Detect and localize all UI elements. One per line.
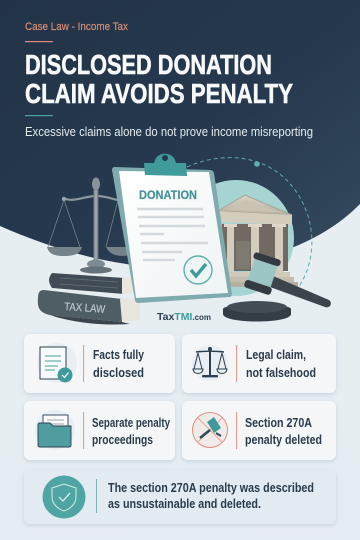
card text: Legal claim, (246, 347, 306, 362)
card text: not falsehood (246, 365, 316, 380)
courthouse (212, 195, 298, 287)
card text (93, 347, 145, 380)
icon: shield check (42, 476, 86, 518)
clipboard heading: DONATION (139, 188, 197, 202)
card text: Section 270A (245, 415, 312, 430)
hero illustration (38, 154, 331, 325)
clipboard clip (144, 154, 187, 176)
document lines (137, 209, 208, 260)
card: separate proceedings (24, 401, 175, 460)
title: CLAIM AVOIDS PENALTY (25, 78, 293, 109)
banner text (108, 480, 314, 511)
card: facts fully disclosed (24, 334, 175, 393)
card text: proceedings (92, 432, 153, 447)
accent line: coral (25, 41, 53, 42)
card text: disclosed (93, 365, 144, 380)
gavel (223, 252, 331, 322)
stacked books (38, 273, 140, 325)
card text: Separate penalty (92, 415, 171, 430)
banner text: The section 270A penalty was described (108, 480, 314, 495)
card: penalty deleted (182, 401, 336, 460)
scales of justice (47, 178, 130, 274)
card text (245, 415, 322, 447)
teal circle behind courthouse (178, 180, 294, 296)
accent line: teal (25, 115, 53, 116)
icon: crossed out gavel (192, 412, 228, 448)
clipboard (112, 154, 232, 303)
icon: document with check (37, 343, 77, 383)
subtitle: Excessive claims alone do not prove income misreporting (25, 125, 313, 139)
card text: penalty deleted (245, 432, 322, 447)
conclusion banner (24, 470, 336, 524)
category label: Case Law - Income Tax (25, 21, 128, 33)
title: DISCLOSED DONATION (25, 49, 272, 80)
card text: Facts fully (93, 347, 145, 362)
dashed orbit with dot (187, 158, 312, 288)
icon: folder (35, 410, 75, 450)
title (25, 49, 293, 109)
card text (246, 347, 316, 380)
book title: TAX LAW (64, 301, 106, 316)
check badge (184, 256, 212, 284)
card: legal claim (182, 334, 336, 393)
card text (92, 415, 171, 447)
brand logo: TaxTMI.com (157, 311, 211, 323)
dark header with curved lower edge (0, 0, 360, 268)
banner text: as unsustainable and deleted. (108, 496, 261, 511)
icon: balance scale (192, 345, 228, 381)
